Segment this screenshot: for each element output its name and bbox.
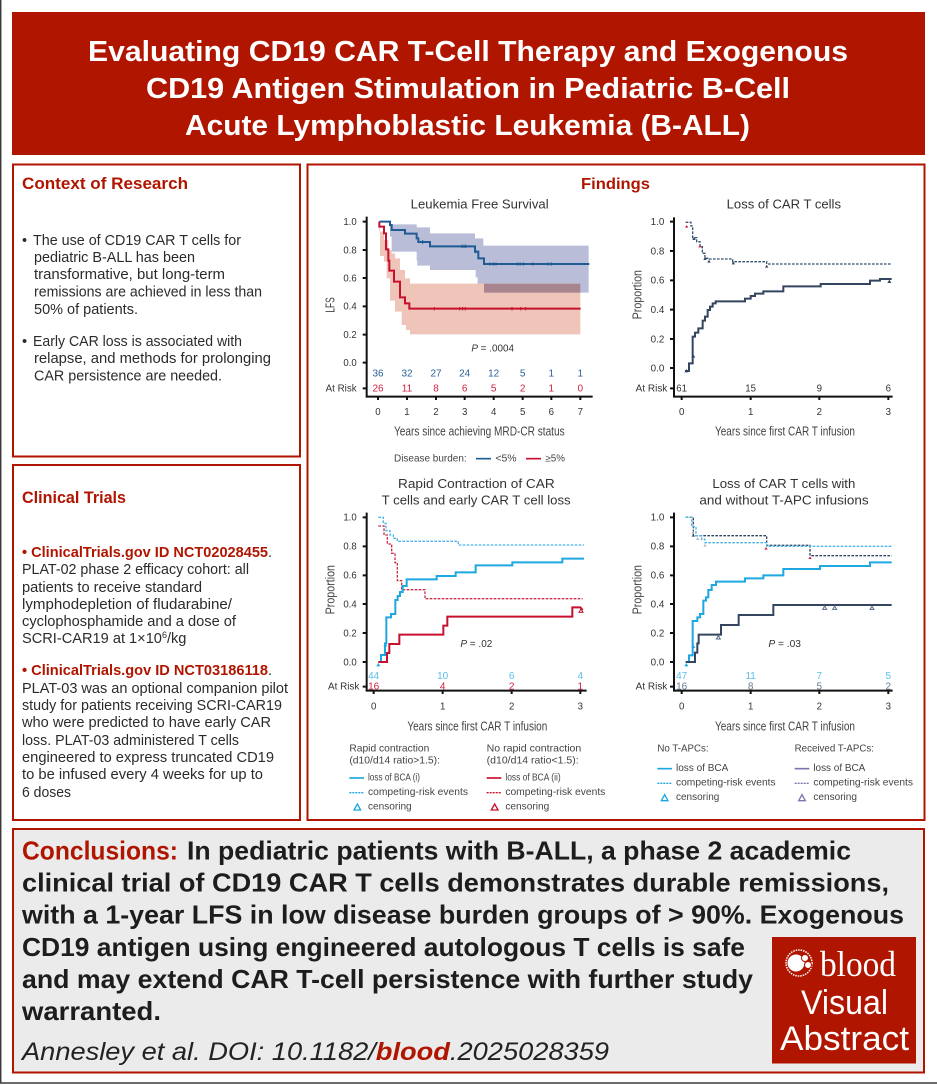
- y tick labels: 0.0: [343, 358, 357, 369]
- legend: Rapid contraction: [349, 744, 429, 755]
- x axis label: Years since first CAR T infusion: [715, 424, 855, 438]
- text block: trial NCT02028455: 6: [162, 630, 167, 640]
- chart: rapid contraction: P = .02: [460, 639, 492, 650]
- chart: loss with and without T-APC: 2: [817, 702, 822, 713]
- chart: loss with and without T-APC: [631, 476, 913, 803]
- text block: context bullets: 50% of patients.: [34, 302, 138, 318]
- chart: loss with and without T-APC: P = .03: [768, 639, 801, 650]
- legend: <5%: [495, 454, 517, 465]
- text block: trial NCT03186118: to be infused every 4 weeks for up to: [22, 767, 263, 783]
- p value: P = .0004: [471, 344, 515, 355]
- censoring marks: [684, 645, 695, 666]
- y tick labels: 1.0: [343, 217, 357, 228]
- chart: leukemia free survival: 11: [402, 384, 413, 395]
- y tick labels: At Risk: [326, 383, 357, 394]
- x tick labels: 7: [578, 407, 583, 418]
- at risk counts: 5: [886, 671, 892, 682]
- chart: loss with and without T-APC: 16: [676, 682, 688, 693]
- text block: trial NCT02028455: .: [268, 545, 272, 561]
- text block: context bullets: CAR persistence are needed.: [34, 368, 222, 384]
- text block: conclusions: and may extend CAR T-cell persistence with further study: [22, 964, 754, 994]
- legend: competing-risk events: [813, 778, 913, 789]
- competing-risk line: [686, 222, 892, 264]
- chart: loss with and without T-APC: 0.6: [651, 571, 664, 582]
- survival line: <5%: [379, 222, 589, 264]
- chart: loss of CAR T cells: 9: [817, 384, 822, 395]
- text block: conclusions: warranted.: [21, 996, 161, 1026]
- chart: leukemia free survival: 1: [549, 384, 555, 395]
- legend: censoring: [505, 801, 549, 812]
- at risk counts: [372, 368, 584, 379]
- y tick labels: 0.6: [343, 273, 357, 284]
- legend: No T-APCs:: [657, 744, 709, 755]
- text block: context bullets: pediatric B-ALL has been: [34, 250, 195, 266]
- chart: rapid contraction: 0.8: [343, 542, 357, 553]
- tick labels: At Risk: [636, 384, 667, 395]
- chart: rapid contraction: 0.2: [343, 628, 357, 639]
- y tick labels: [326, 217, 357, 394]
- tick labels: 0.2: [651, 334, 664, 345]
- text block: trial NCT02028455: PLAT-02 phase 2 efficacy cohort: all: [22, 562, 249, 578]
- panel: clinical trials: [13, 465, 300, 820]
- x tick labels: 4: [491, 407, 497, 418]
- chart title: T cells and early CAR T cell loss: [382, 492, 571, 507]
- at risk counts: 44: [368, 671, 380, 682]
- text block: context bullets: •: [22, 334, 27, 350]
- chart: loss with and without T-APC: Proportion: [631, 565, 645, 614]
- chart: leukemia free survival: 5: [491, 384, 497, 395]
- title banner: Evaluating CD19 CAR T-Cell Therapy and Exogenous: [88, 36, 848, 68]
- legend: loss of BCA (i): [368, 772, 420, 783]
- chart: loss with and without T-APC: 3: [886, 702, 891, 713]
- chart: rapid contraction: 3: [578, 702, 583, 713]
- text block: conclusions: [21, 836, 904, 1026]
- legend: No rapid contraction: [487, 744, 581, 755]
- solid lines: [686, 562, 892, 662]
- text block: trial NCT03186118: 6 doses: [22, 785, 71, 801]
- chart: rapid contraction: 0.4: [343, 599, 357, 610]
- logo: blood visual abstract: blood: [820, 944, 896, 984]
- x tick labels: 5: [520, 407, 525, 418]
- text block: trial NCT02028455: lymphodepletion of fludarabine/: [22, 597, 233, 613]
- y tick labels: 0.2: [343, 330, 357, 341]
- text block: trial NCT03186118: • ClinicalTrials.gov ID NCT03186118: [22, 663, 268, 679]
- x tick labels: 0: [375, 407, 381, 418]
- text block: trial NCT03186118: [21, 663, 288, 801]
- text block: context bullets: [22, 233, 271, 384]
- chart title: Loss of CAR T cells: [727, 197, 841, 212]
- text block: context bullets: remissions are achieved in less than: [34, 284, 262, 300]
- chart: rapid contraction: Proportion: [324, 565, 338, 614]
- chart: leukemia free survival: [324, 197, 593, 465]
- x tick labels: [375, 407, 583, 418]
- title banner: Acute Lymphoblastic Leukemia (B-ALL): [185, 110, 750, 142]
- at risk counts: 32: [401, 368, 413, 379]
- chart: loss with and without T-APC: 0.2: [651, 628, 664, 639]
- loss line: [685, 279, 892, 371]
- chart: loss with and without T-APC: 2: [886, 682, 892, 693]
- at risk counts: 47: [676, 671, 688, 682]
- chart: loss of CAR T cells: 15: [745, 384, 756, 395]
- tick labels: [636, 217, 667, 395]
- chart: rapid contraction: 1: [440, 702, 445, 713]
- chart title: Rapid Contraction of CAR: [398, 476, 555, 491]
- x tick labels: 6: [549, 407, 554, 418]
- at risk counts: 5: [520, 368, 526, 379]
- at risk counts: 1: [578, 368, 584, 379]
- tick labels: 0.4: [651, 305, 665, 316]
- confidence band: ≥5%: [379, 222, 580, 334]
- x tick labels: 2: [433, 407, 439, 418]
- chart: loss of CAR T cells: 61: [676, 384, 687, 395]
- logo: blood visual abstract: Abstract: [780, 1020, 910, 1058]
- text block: trial NCT03186118: .: [268, 663, 272, 679]
- chart: leukemia free survival: 8: [433, 384, 439, 395]
- tick labels: 1.0: [651, 217, 664, 228]
- axes: [670, 217, 893, 400]
- chart title: [382, 476, 571, 507]
- chart: loss with and without T-APC: 0.4: [651, 599, 665, 610]
- text block: trial NCT02028455: • ClinicalTrials.gov ID NCT02028455: [22, 545, 268, 561]
- legend: censoring: [676, 792, 719, 803]
- x axis label: Years since first CAR T infusion: [407, 719, 547, 733]
- chart: loss of CAR T cells: [631, 197, 893, 438]
- legend: ≥5%: [545, 454, 565, 465]
- text block: trial NCT02028455: /kg: [167, 631, 186, 647]
- text block: context bullets: The use of CD19 CAR T cells for: [33, 233, 241, 249]
- y tick labels: 0.4: [343, 302, 357, 313]
- tick labels: 0.0: [651, 363, 664, 374]
- at risk counts: 12: [488, 368, 500, 379]
- text block: trial NCT02028455: SCRI-CAR19 at 1×10: [22, 631, 162, 647]
- legend: loss of BCA: [813, 763, 866, 774]
- at risk counts: 11: [745, 671, 756, 682]
- chart: rapid contraction: 16: [368, 682, 380, 693]
- logo: blood visual abstract: [772, 937, 916, 1064]
- axes: [363, 217, 593, 400]
- chart title: and without T-APC infusions: [699, 492, 869, 507]
- chart: rapid contraction: 2: [509, 702, 514, 713]
- text block: trial NCT03186118: PLAT-03 was an optional companion pilot: [22, 681, 288, 697]
- legend: loss of BCA (ii): [505, 772, 561, 783]
- legend: [394, 454, 565, 465]
- legend: Disease burden:: [394, 454, 467, 465]
- legend: Received T-APCs:: [795, 744, 874, 755]
- panel: conclusions: [13, 829, 924, 1072]
- chart: loss of CAR T cells: 3: [886, 407, 891, 418]
- at risk counts: 1: [549, 368, 555, 379]
- icon: blood society seal: [786, 950, 812, 976]
- text block: trial NCT02028455: patients to receive standard: [22, 580, 202, 596]
- chart: loss with and without T-APC: At Risk: [636, 682, 667, 693]
- dashed lines: [378, 517, 584, 545]
- at risk counts: 36: [372, 368, 384, 379]
- legend: loss of BCA: [676, 763, 729, 774]
- x tick labels: 3: [462, 407, 467, 418]
- chart title: Loss of CAR T cells with: [712, 476, 855, 491]
- text block: conclusions: In pediatric patients with B-ALL, a phase 2 academic: [187, 836, 851, 866]
- axes: [363, 513, 587, 694]
- legend: (d10/d14 ratio>1.5):: [349, 756, 440, 767]
- text block: context bullets: transformative, but long-term: [34, 267, 225, 283]
- title banner: CD19 Antigen Stimulation in Pediatric B-Cell: [146, 73, 790, 105]
- dashed lines: [686, 517, 892, 556]
- legend: [657, 744, 913, 803]
- legend: competing-risk events: [676, 778, 776, 789]
- x tick labels: 1: [404, 407, 410, 418]
- censoring marks: [684, 237, 891, 372]
- at risk counts: 6: [509, 671, 515, 682]
- text block: conclusions: with a 1-year LFS in low disease burden groups of > 90%. Exogenous: [21, 900, 904, 930]
- chart: rapid contraction: 1: [578, 682, 584, 693]
- chart: rapid contraction: [324, 476, 606, 812]
- chart: rapid contraction: 0.0: [343, 657, 357, 668]
- title banner: [12, 12, 925, 155]
- chart: loss with and without T-APC: 5: [817, 682, 823, 693]
- at risk counts: 7: [817, 671, 823, 682]
- at risk counts: 24: [459, 368, 471, 379]
- axes: [670, 513, 893, 694]
- at risk counts: 10: [437, 671, 449, 682]
- chart: loss of CAR T cells: 2: [817, 407, 822, 418]
- text block: trial NCT02028455: [22, 545, 272, 647]
- text block: context bullets: •: [22, 233, 27, 249]
- chart: loss of CAR T cells: Proportion: [631, 270, 645, 319]
- chart: rapid contraction: At Risk: [328, 682, 359, 693]
- chart: loss with and without T-APC: 1: [748, 702, 753, 713]
- chart: rapid contraction: 0: [371, 702, 376, 713]
- legend: competing-risk events: [505, 787, 606, 798]
- chart: rapid contraction: 1.0: [343, 513, 357, 524]
- legend: [349, 744, 606, 812]
- chart: leukemia free survival: 2: [520, 384, 526, 395]
- legend: censoring: [368, 801, 412, 812]
- text block: conclusions: CD19 antigen using engineered autologous T cells is safe: [22, 932, 745, 962]
- text block: conclusions: Conclusions:: [22, 836, 178, 866]
- chart: loss with and without T-APC: 8: [748, 682, 754, 693]
- y axis label: LFS: [324, 297, 338, 313]
- x axis label: Years since first CAR T infusion: [715, 719, 855, 733]
- confidence band: <5%: [390, 222, 589, 293]
- text block: context bullets: Early CAR loss is associated with: [33, 334, 242, 350]
- heading: context of research: Context of Research: [22, 174, 188, 193]
- legend: censoring: [813, 792, 857, 803]
- chart: loss with and without T-APC: 0.8: [651, 542, 664, 553]
- text block: trial NCT03186118: loss. PLAT-03 administered T cells: [22, 733, 239, 749]
- heading: clinical trials: Clinical Trials: [22, 488, 126, 507]
- legend: (d10/d14 ratio<1.5):: [487, 756, 579, 767]
- chart title: [699, 476, 869, 507]
- chart title: Leukemia Free Survival: [411, 197, 549, 212]
- y tick labels: 0.8: [343, 245, 357, 256]
- at risk counts: [676, 671, 892, 682]
- text block: trial NCT03186118: engineered to express truncated CD19: [22, 750, 274, 766]
- chart: loss with and without T-APC: 1.0: [651, 513, 664, 524]
- at risk counts: 27: [430, 368, 442, 379]
- censoring marks: [376, 643, 387, 666]
- tick labels: 0.8: [651, 246, 664, 257]
- panel: context of research: [13, 164, 300, 456]
- chart: loss of CAR T cells: 1: [748, 407, 753, 418]
- x axis label: Years since achieving MRD-CR status: [394, 424, 565, 438]
- logo: blood visual abstract: Visual: [801, 984, 888, 1022]
- citation: Annesley et al. DOI: 10.1182/ blood.2025028359: [20, 1038, 609, 1066]
- at risk counts: 4: [578, 671, 584, 682]
- text block: trial NCT03186118: study for patients receiving SCRI-CAR19: [22, 698, 282, 714]
- heading: findings: Findings: [581, 176, 650, 193]
- chart: rapid contraction: 4: [440, 682, 446, 693]
- chart: leukemia free survival: 0: [578, 384, 584, 395]
- chart: loss of CAR T cells: 6: [886, 384, 891, 395]
- chart: leukemia free survival: 6: [462, 384, 468, 395]
- chart: leukemia free survival: 26: [372, 384, 384, 395]
- at risk counts: [368, 671, 584, 682]
- chart: loss with and without T-APC: 0.0: [651, 657, 664, 668]
- chart: rapid contraction: 2: [509, 682, 515, 693]
- panel: findings: [308, 164, 924, 820]
- chart: loss with and without T-APC: 0: [679, 702, 684, 713]
- text block: trial NCT03186118: who were predicted to have early CAR: [21, 715, 271, 731]
- survival line: ≥5%: [379, 222, 581, 309]
- chart: rapid contraction: 0.6: [343, 571, 357, 582]
- text block: context bullets: relapse, and methods for prolonging: [34, 351, 271, 367]
- legend: competing-risk events: [368, 787, 468, 798]
- text block: conclusions: clinical trial of CD19 CAR T cells demonstrates durable remissions,: [22, 868, 889, 898]
- solid lines: [378, 559, 584, 662]
- tick labels: 0.6: [651, 276, 664, 287]
- chart: loss of CAR T cells: 0: [679, 407, 684, 418]
- text block: trial NCT02028455: cyclophosphamide and a dose of: [22, 614, 237, 630]
